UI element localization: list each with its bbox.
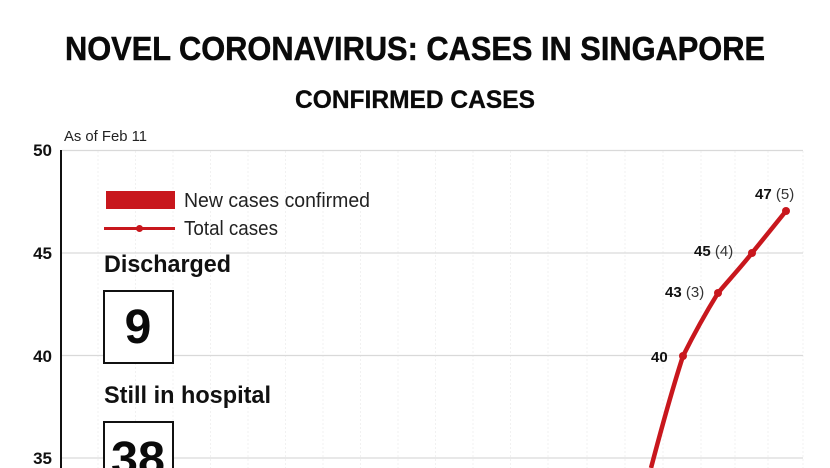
y axis labels (33, 141, 52, 468)
date note: As of Feb 11 (64, 128, 147, 145)
discharged count box (104, 291, 173, 363)
title: NOVEL CORONAVIRUS: CASES IN SINGAPORE (65, 30, 765, 67)
legend swatch: new cases confirmed (106, 191, 175, 209)
data label: 40: 40 (651, 349, 668, 366)
data label: 45 (4): 45 (4) (694, 243, 733, 260)
discharged heading: Discharged (104, 251, 231, 278)
legend label: total cases: Total cases (184, 218, 278, 240)
panel: discharged (104, 251, 231, 363)
still in hospital heading: Still in hospital (104, 382, 271, 409)
data label: 47 (5): 47 (5) (755, 186, 794, 203)
discharged count: 9 (125, 301, 151, 354)
panel: still in hospital (104, 382, 271, 468)
still in hospital count box (104, 422, 173, 468)
legend (104, 190, 370, 240)
line chart: total cases (651, 207, 790, 468)
y axis labels: 50 (33, 141, 52, 160)
y axis line (60, 150, 62, 468)
data label: 43 (3): 43 (3) (665, 284, 704, 301)
legend swatch: total cases (104, 225, 175, 232)
y axis labels: 40 (33, 347, 52, 366)
legend label: new cases confirmed: New cases confirmed (184, 190, 370, 212)
y axis labels: 45 (33, 244, 52, 263)
y axis labels: 35 (33, 449, 52, 468)
subtitle: CONFIRMED CASES (295, 86, 535, 114)
